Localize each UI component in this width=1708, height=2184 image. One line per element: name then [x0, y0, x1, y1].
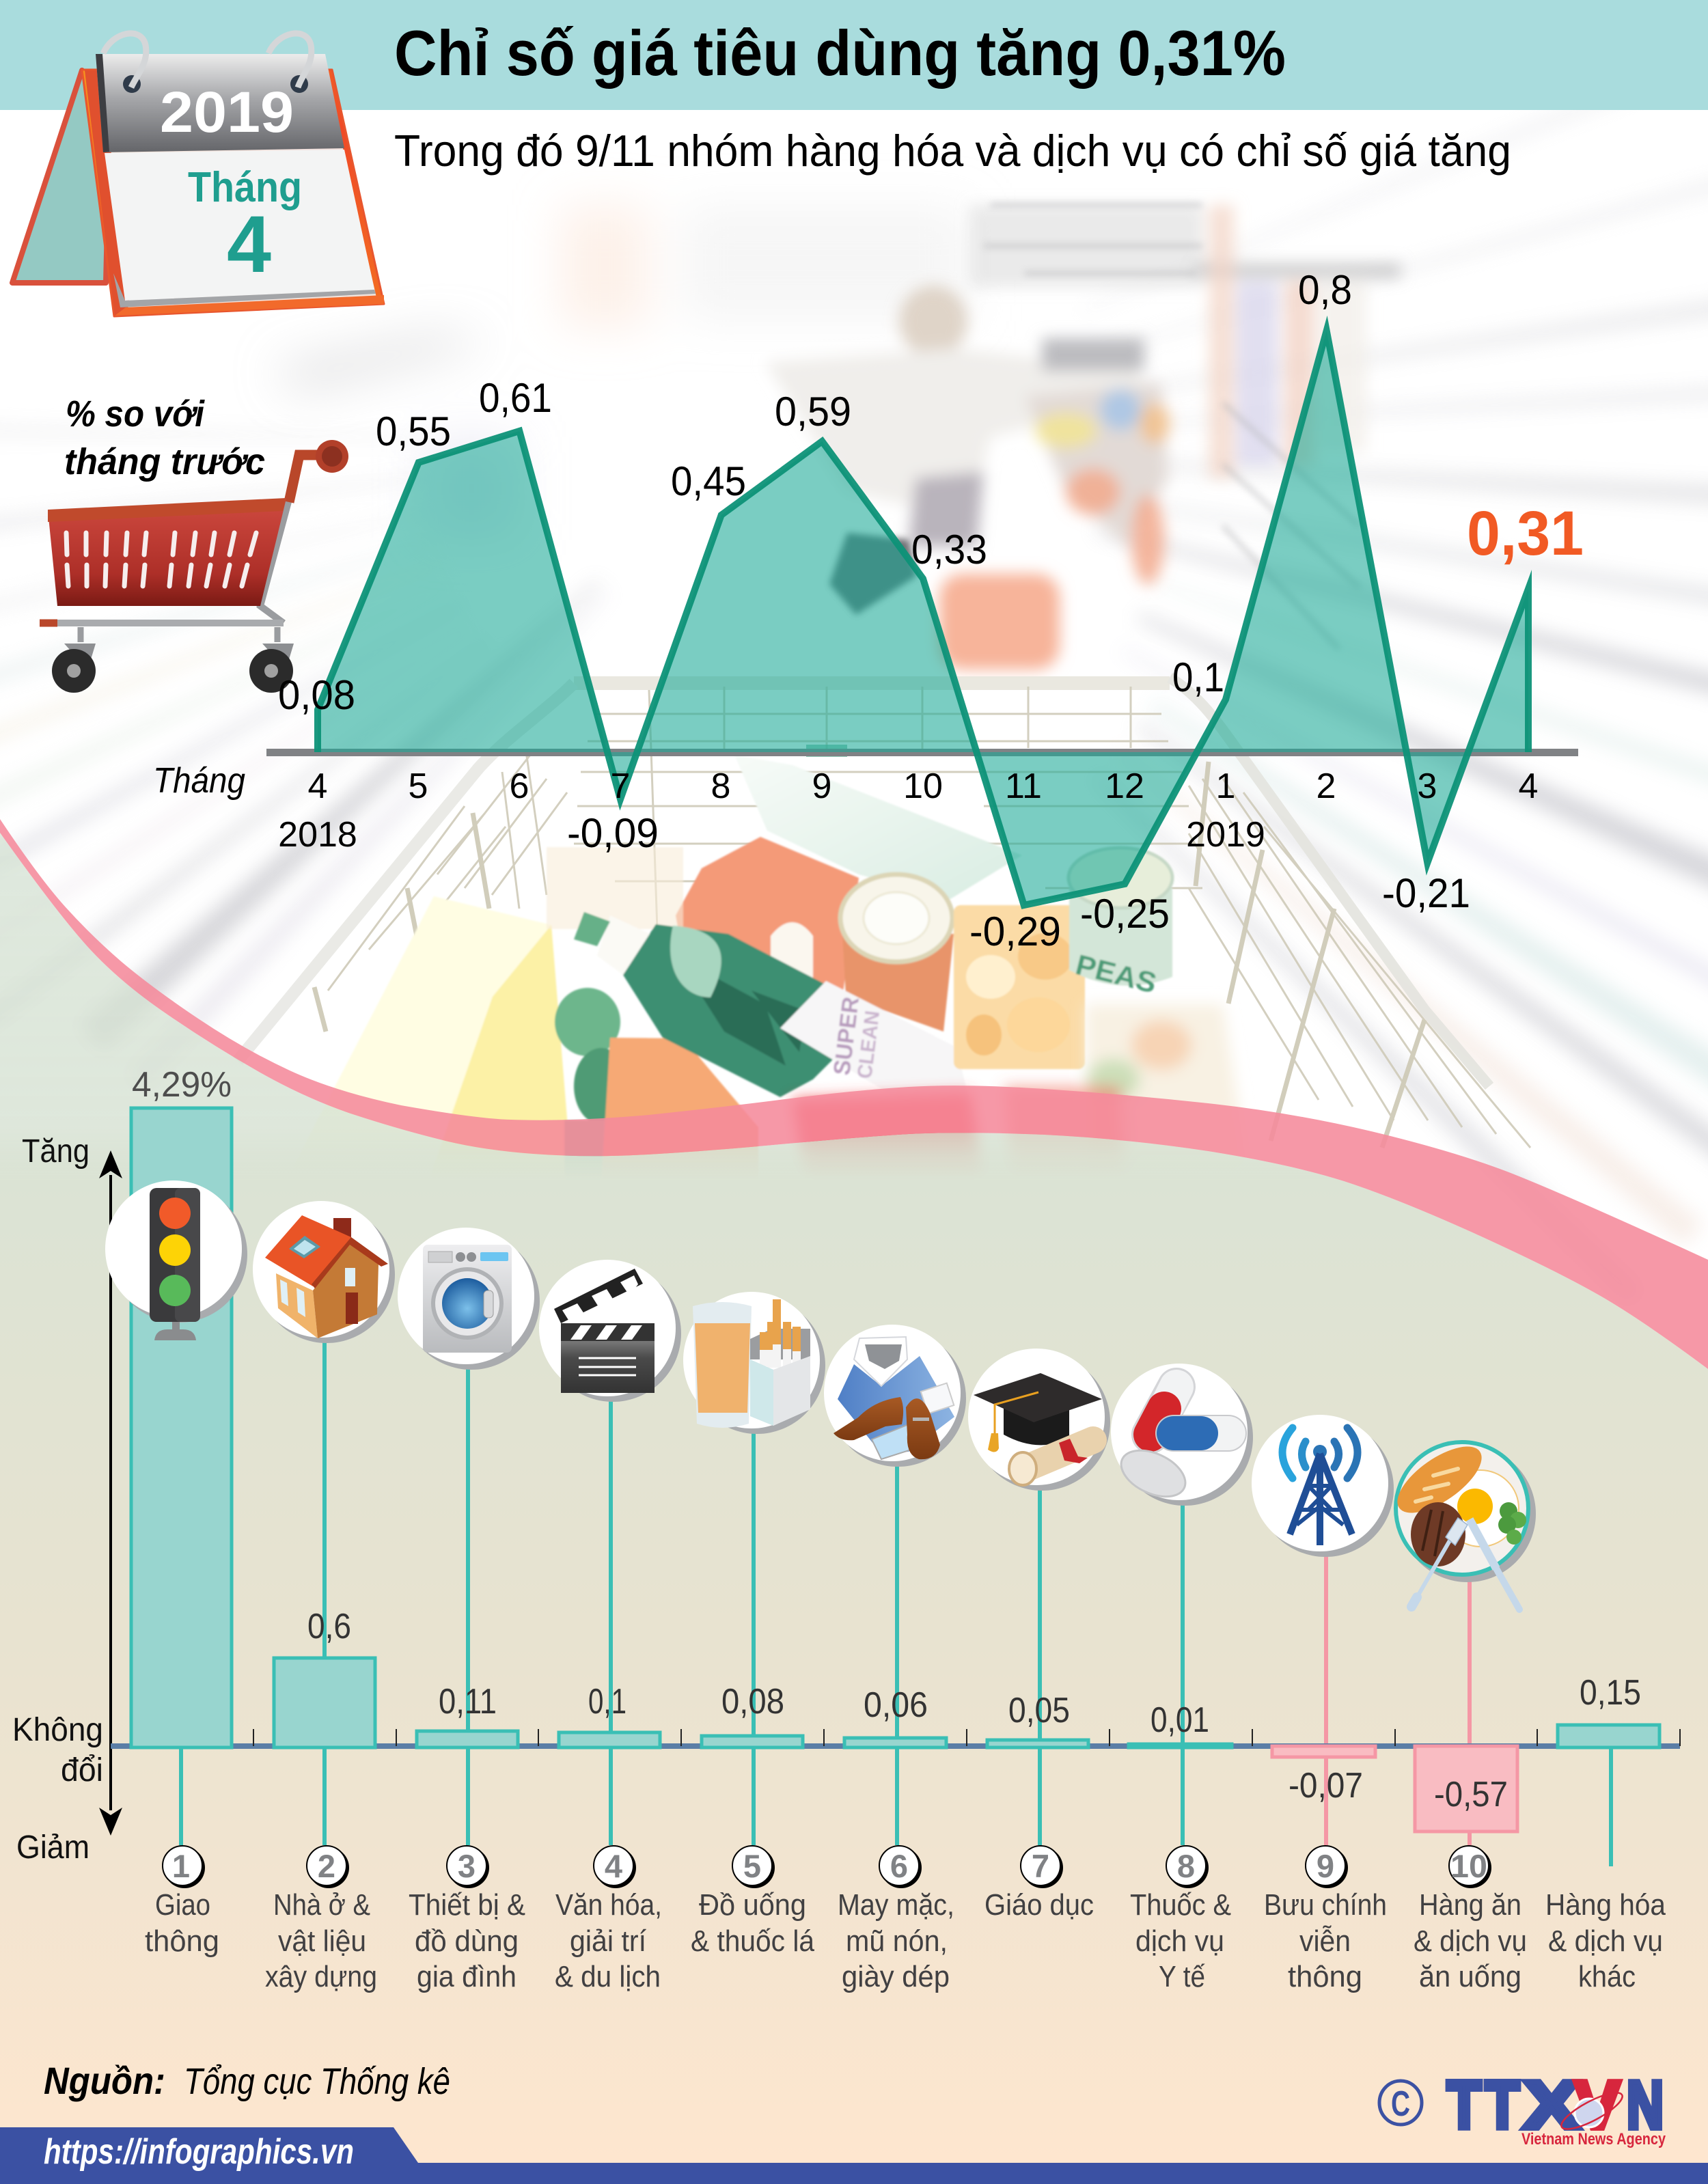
category labels: & dịch vụ	[1548, 1924, 1663, 1958]
category labels: thông	[145, 1924, 219, 1958]
background photo: supermarket trolley with motion blur	[0, 0, 1708, 1307]
title: Chỉ số giá tiêu dùng tăng 0,31%	[394, 17, 1286, 89]
icon: drink and cigarettes	[683, 1292, 825, 1434]
icon: medicine pills	[1111, 1364, 1253, 1506]
connector stems	[181, 1339, 1611, 1866]
icon: shopping cart	[40, 440, 348, 693]
category labels: Văn hóa,	[555, 1888, 662, 1922]
icon: telecom tower	[1252, 1415, 1394, 1557]
icon: shirt and shoes	[824, 1325, 966, 1467]
text: percent compared with previous month: % so với	[66, 393, 205, 434]
source note	[44, 2059, 450, 2102]
chart axis labels: 2019	[1186, 815, 1265, 855]
chart value labels	[278, 267, 1470, 954]
numbered circles: 6	[890, 1848, 908, 1884]
chart value labels: -0,21	[1382, 870, 1470, 916]
vertical axis arrow	[99, 1150, 122, 1836]
bottom panel background gradient	[0, 833, 1708, 2184]
logo: copyright and TTXVN: T	[1485, 2067, 1519, 2142]
category labels: Hàng ăn	[1419, 1888, 1521, 1922]
numbered circles: 9	[1317, 1848, 1334, 1884]
bar chart: groups of goods and services	[12, 1065, 1680, 1866]
chart axis labels: 7	[611, 766, 630, 806]
chart value labels: -0,29	[969, 909, 1061, 954]
icon: desk calendar 2019 month 4: Tháng	[188, 164, 302, 211]
numbered circles: 1	[172, 1848, 190, 1884]
baseline ticks	[253, 1729, 1680, 1746]
logo: copyright and TTXVN: V	[1575, 2067, 1620, 2142]
chart value labels: 0,08	[278, 672, 355, 718]
category labels: Thiết bị &	[409, 1888, 525, 1922]
bar value labels: 0,15	[1580, 1673, 1641, 1713]
category labels: dịch vụ	[1135, 1924, 1224, 1958]
icon: desk calendar 2019 month 4: 4	[227, 199, 271, 290]
category labels: xây dựng	[265, 1960, 377, 1993]
category labels: mũ nón,	[846, 1924, 948, 1958]
category labels: thông	[1288, 1960, 1362, 1993]
bar value labels: 0,6	[307, 1607, 351, 1646]
bar value labels: 0,1	[588, 1682, 626, 1722]
category labels: đồ dùng	[415, 1924, 519, 1958]
chart value labels: 0,55	[376, 409, 451, 454]
background photo: supermarket trolley with motion blur: SUPER	[829, 995, 864, 1077]
category labels: Bưu chính	[1264, 1888, 1387, 1922]
trolley rails and wires	[238, 678, 1530, 1148]
chart value labels: 0,59	[775, 389, 851, 434]
numbered circles: 10	[1450, 1848, 1487, 1884]
source note: Nguồn:	[44, 2059, 165, 2102]
pink wave band	[0, 819, 1708, 1369]
category labels: gia đình	[417, 1960, 516, 1993]
chart axis labels: 12	[1105, 766, 1144, 806]
axis labels	[12, 1133, 103, 1866]
text: percent compared with previous month	[64, 393, 265, 482]
category labels: & dịch vụ	[1414, 1924, 1527, 1958]
text: percent compared with previous month: tháng trước	[64, 441, 265, 482]
category labels: Giáo dục	[984, 1888, 1094, 1922]
icon: film clapperboard	[539, 1260, 681, 1402]
category labels: & du lịch	[555, 1960, 661, 1993]
chart axis labels: Tháng	[153, 761, 245, 801]
chart value labels: 0,61	[479, 375, 552, 421]
icon: desk calendar 2019 month 4: 2019	[160, 80, 294, 144]
chart axis labels: 4	[1519, 766, 1538, 806]
chart axis labels	[153, 761, 1538, 855]
chart value labels: 0,45	[671, 458, 746, 504]
icon: desk calendar 2019 month 4	[12, 33, 384, 316]
bar value labels: 0,11	[439, 1682, 497, 1722]
chart axis labels: 11	[1005, 766, 1042, 806]
chart area and line	[318, 331, 1528, 905]
bar value labels: 0,08	[721, 1682, 784, 1722]
icon: traffic light	[105, 1180, 247, 1340]
category labels	[145, 1888, 1666, 1993]
logo: copyright and TTXVN: T	[1447, 2067, 1481, 2142]
category labels: khác	[1578, 1960, 1636, 1993]
chart axis labels: 3	[1418, 766, 1437, 806]
numbered circles: 2	[318, 1848, 335, 1884]
category labels: ăn uống	[1419, 1960, 1521, 1993]
category labels: Giao	[155, 1888, 210, 1922]
chart axis labels: 2018	[278, 815, 357, 855]
icon: washing machine	[398, 1228, 540, 1370]
chart axis labels: 6	[510, 766, 529, 806]
source note: Tổng cục Thống kê	[184, 2061, 450, 2102]
category labels: Y tế	[1159, 1960, 1205, 1993]
axis labels: Tăng	[22, 1133, 89, 1170]
category labels: May mặc,	[838, 1888, 954, 1922]
category labels: Thuốc &	[1130, 1888, 1231, 1922]
chart value labels: -0,09	[567, 810, 659, 856]
category labels: & thuốc lá	[691, 1924, 814, 1958]
background photo: supermarket trolley with motion blur: PEAS	[1073, 948, 1160, 999]
category labels: vật liệu	[278, 1924, 366, 1958]
axis labels: đổi	[61, 1752, 103, 1788]
line chart: CPI month over month	[153, 267, 1584, 954]
chart axis labels: 2	[1317, 766, 1336, 806]
highlighted value 0,31: 0,31	[1467, 499, 1584, 568]
axis labels: Giảm	[16, 1829, 89, 1866]
numbered circles: 7	[1032, 1848, 1049, 1884]
chart value labels: 0,8	[1298, 267, 1352, 313]
bar value labels	[132, 1065, 1641, 1814]
bar value labels: 0,05	[1008, 1691, 1070, 1730]
logo: copyright and TTXVN: Vietnam News Agency	[1521, 2130, 1666, 2148]
category labels: Đồ uống	[699, 1888, 806, 1922]
numbered circles: 8	[1177, 1848, 1195, 1884]
chart axis labels: 9	[812, 766, 831, 806]
chart axis	[266, 749, 1578, 756]
chart axis labels: 4	[308, 766, 327, 806]
bar value labels: 0,06	[864, 1685, 928, 1725]
category labels: giải trí	[570, 1924, 647, 1958]
axis labels: Không	[12, 1712, 103, 1748]
bar value labels: -0,57	[1434, 1775, 1508, 1814]
bar value labels: 4,29%	[132, 1065, 232, 1105]
logo: copyright and TTXVN: N	[1627, 2067, 1664, 2142]
website url: https://infographics.vn	[44, 2132, 354, 2172]
bar value labels: 0,01	[1151, 1700, 1209, 1740]
dark blurred shape behind chart	[829, 533, 917, 615]
subtitle: Trong đó 9/11 nhóm hàng hóa và dịch vụ có chỉ số giá tăng	[394, 126, 1511, 176]
chart value labels: 0,33	[911, 527, 987, 572]
category labels: Nhà ở &	[273, 1888, 370, 1922]
chart axis labels: 8	[711, 766, 730, 806]
icon: house	[253, 1201, 395, 1343]
bars	[131, 1108, 1659, 1831]
chart axis labels: 10	[903, 766, 943, 806]
logo: copyright and TTXVN: X	[1524, 2067, 1580, 2142]
icon: plate of food with fork and knife	[1387, 1434, 1536, 1609]
numbered circles	[163, 1846, 1491, 1888]
numbered circles: 5	[743, 1848, 761, 1884]
chart axis labels: 5	[409, 766, 428, 806]
logo: copyright and TTXVN	[1379, 2067, 1666, 2148]
numbered circles: 4	[605, 1848, 622, 1884]
numbered circles: 3	[458, 1848, 476, 1884]
background photo: supermarket trolley with motion blur: CLEAN	[853, 1010, 884, 1080]
logo: copyright and TTXVN: C	[1391, 2084, 1410, 2124]
category labels: giày dép	[842, 1960, 950, 1993]
bar value labels: -0,07	[1289, 1766, 1363, 1806]
chart value labels: -0,25	[1080, 891, 1170, 937]
category labels: Hàng hóa	[1545, 1888, 1666, 1922]
footer bar	[0, 2127, 1708, 2184]
baseline strip	[111, 1743, 1680, 1749]
icon: graduation cap and diploma	[968, 1349, 1110, 1491]
chart axis labels: 1	[1216, 766, 1235, 806]
category labels: viễn	[1299, 1924, 1351, 1958]
header band	[0, 0, 1708, 110]
chart value labels: 0,1	[1172, 654, 1224, 700]
